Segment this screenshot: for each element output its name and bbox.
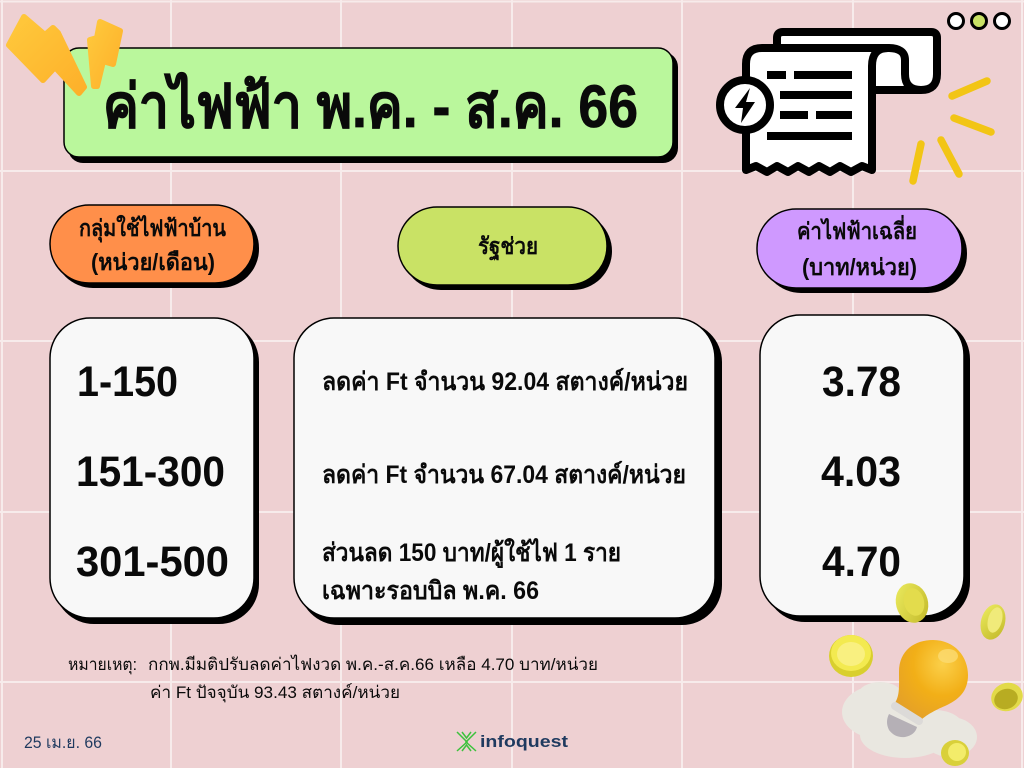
panel: usage ranges xyxy=(50,318,259,624)
pill heading: government help xyxy=(398,207,612,290)
icon: yellow sparks xyxy=(913,81,991,181)
panel: average rates: 3.78 xyxy=(822,358,901,406)
pill heading: average electricity cost xyxy=(757,209,967,293)
panel: government help details xyxy=(294,318,722,625)
panel: usage ranges: 151-300 xyxy=(76,448,225,496)
pill heading: government help: รัฐช่วย xyxy=(478,233,538,261)
footnote: กกพ.มีมติปรับลดค่าไฟงวด พ.ค.-ส.ค.66 เหลือ 4.70 บาท/หน่วย xyxy=(148,654,598,674)
panel: government help details: ส่วนลด 150 บาท/ผู้ใช้ไฟ 1 ราย xyxy=(322,537,621,569)
icon: electricity bill receipt xyxy=(720,32,937,172)
pill heading: household usage group: กลุ่มใช้ไฟฟ้าบ้าน xyxy=(79,214,226,243)
footnote: หมายเหตุ: xyxy=(68,655,137,675)
panel: usage ranges: 301-500 xyxy=(76,538,229,586)
date: 25 เม.ย. 66 xyxy=(24,733,102,752)
pill heading: household usage group xyxy=(50,205,259,288)
icon: lightning bolts xyxy=(9,17,120,93)
panel: government help details: เฉพาะรอบบิล พ.ค. 66 xyxy=(322,577,539,605)
pill heading: average electricity cost: ค่าไฟฟ้าเฉลี่ย xyxy=(797,214,917,244)
title text: ค่าไฟฟ้า พ.ค. - ส.ค. 66 xyxy=(103,71,638,140)
panel: government help details: ลดค่า Ft จำนวน 67.04 สตางค์/หน่วย xyxy=(322,460,686,489)
illustration: light bulb, cloud and coins xyxy=(829,580,1024,766)
footnote xyxy=(68,654,598,703)
pill heading: average electricity cost: (บาท/หน่วย) xyxy=(802,254,917,280)
logo: infoquest xyxy=(457,732,568,751)
footnote: ค่า Ft ปัจจุบัน 93.43 สตางค์/หน่วย xyxy=(150,683,400,703)
title banner xyxy=(64,48,678,163)
logo: infoquest: infoquest xyxy=(480,732,568,751)
panel: usage ranges: 1-150 xyxy=(77,358,178,406)
panel: average rates xyxy=(760,315,970,622)
pill heading: household usage group: (หน่วย/เดือน) xyxy=(91,249,215,275)
panel: average rates: 4.70 xyxy=(822,538,901,586)
panel: government help details: ลดค่า Ft จำนวน 92.04 สตางค์/หน่วย xyxy=(322,367,688,396)
panel: average rates: 4.03 xyxy=(821,448,901,496)
window dots xyxy=(948,14,1010,28)
